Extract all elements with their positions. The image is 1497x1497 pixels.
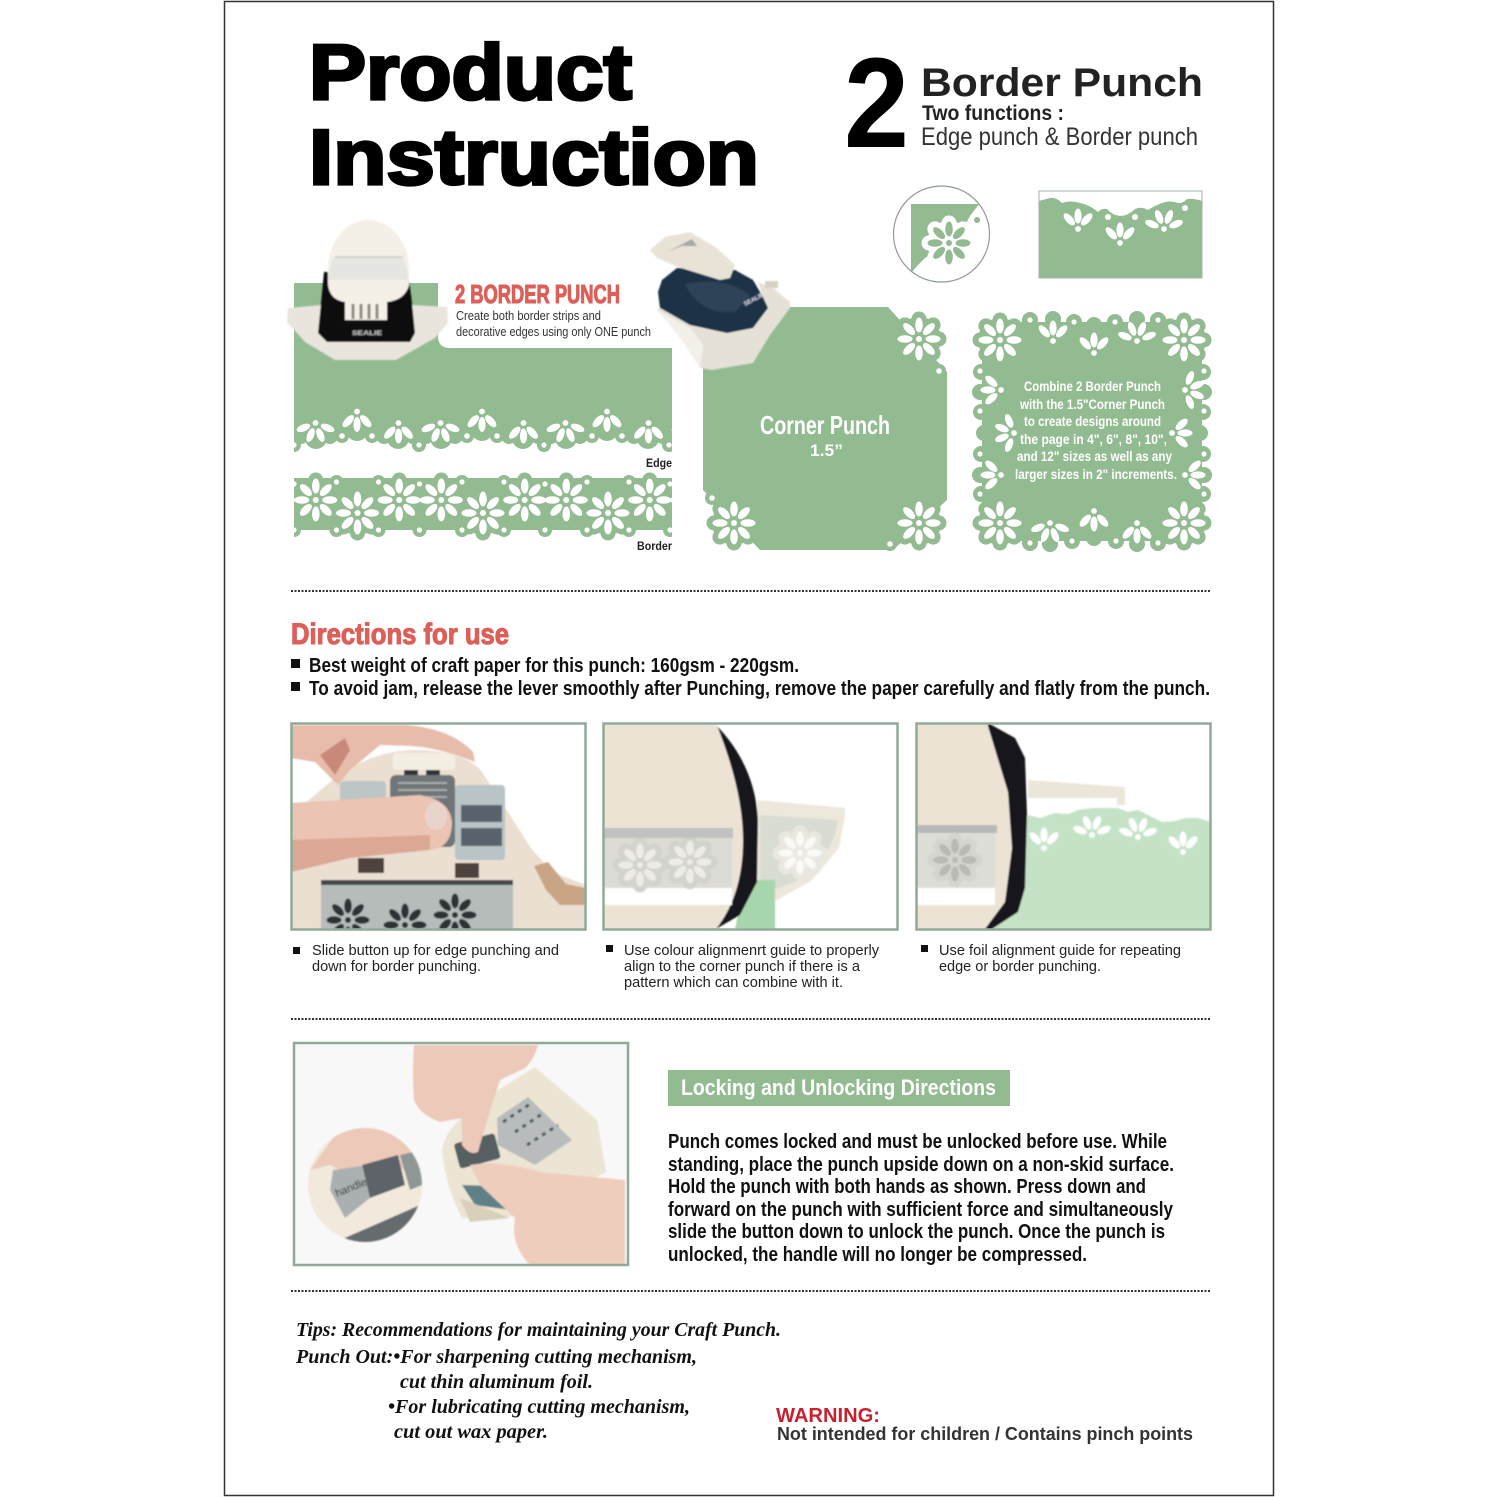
locking directions paragraph: forward on the punch with sufficient force and simultaneously — [668, 1199, 1174, 1221]
icon: navy punch: SEALIE — [743, 292, 765, 308]
locking directions paragraph — [668, 1131, 1174, 1266]
photo: alignment guide — [603, 723, 898, 930]
icon: corner punch sample in circle — [894, 186, 990, 282]
combine text: Combine 2 Border Punch — [1024, 378, 1161, 394]
photo: unlocking with both hands: handle — [334, 1176, 369, 1200]
title: Instruction — [309, 113, 759, 201]
combine text: to create designs around — [1024, 413, 1161, 429]
heading: 2 border punch: decorative edges using only ONE punch — [456, 324, 651, 339]
combine text: the page in 4", 6", 8", 10", — [1020, 431, 1167, 447]
title: Product — [309, 28, 632, 116]
heading: 2 border punch: Create both border strips and — [456, 308, 601, 323]
icon: cream and black punch — [287, 220, 448, 360]
tips text: Tips: Recommendations for maintaining your Craft Punch. — [296, 1319, 781, 1341]
label: border: Border — [637, 541, 672, 553]
caption 2 — [606, 943, 880, 991]
divider — [291, 1018, 1210, 1020]
icon: cream and black punch: SEALIE — [352, 331, 382, 337]
locking directions paragraph: unlocked, the handle will no longer be compressed. — [668, 1244, 1087, 1266]
heading: directions for use: Directions for use — [291, 618, 509, 651]
product name heading — [844, 32, 1203, 175]
warning — [776, 1405, 1193, 1444]
icon: edge punch sample — [1039, 191, 1202, 278]
panel: edge and border strips — [294, 283, 672, 550]
heading: 2 border punch: 2 BORDER PUNCH — [455, 279, 620, 309]
panel: corner punch sample — [703, 307, 947, 551]
caption 2: align to the corner punch if there is a — [624, 959, 861, 975]
caption 1 — [293, 943, 559, 975]
combine text: and 12" sizes as well as any — [1017, 448, 1172, 464]
product name heading: Two functions : — [922, 102, 1064, 125]
caption 3: edge or border punching. — [939, 959, 1101, 975]
tips text: cut out wax paper. — [394, 1421, 548, 1443]
locking directions paragraph: Hold the punch with both hands as shown. Press down and — [668, 1176, 1146, 1198]
title — [309, 28, 759, 201]
caption 3: Use foil alignment guide for repeating — [939, 943, 1181, 959]
heading: locking and unlocking: Locking and Unlocking Directions — [681, 1075, 996, 1100]
directions bullet list: Best weight of craft paper for this punch: 160gsm - 220gsm. — [309, 655, 799, 677]
heading: 2 border punch — [455, 279, 651, 339]
directions bullet list: To avoid jam, release the lever smoothly after Punching, remove the paper carefully and flatly from the punch. — [309, 678, 1210, 700]
combine text — [1015, 378, 1177, 482]
caption 1: down for border punching. — [312, 959, 481, 975]
panel: corner punch sample: 1.5” — [810, 441, 843, 460]
caption 3 — [921, 943, 1181, 975]
locking directions paragraph: slide the button down to unlock the punch. Once the punch is — [668, 1221, 1165, 1243]
caption 2: pattern which can combine with it. — [624, 975, 843, 991]
panel: corner punch sample: Corner Punch — [760, 410, 890, 440]
tips text — [295, 1319, 781, 1443]
page frame — [224, 2, 1274, 1496]
photo: foil alignment — [916, 723, 1211, 930]
panel: combined corner and border sample — [972, 311, 1212, 552]
combine text: with the 1.5"Corner Punch — [1019, 396, 1165, 412]
photo: sliding the button — [291, 723, 586, 946]
divider — [291, 1290, 1210, 1292]
tips text: •For lubricating cutting mechanism, — [388, 1396, 690, 1418]
product name heading: 2 — [844, 32, 909, 175]
photo: unlocking with both hands — [294, 1043, 628, 1265]
divider — [291, 590, 1210, 592]
combine text: larger sizes in 2" increments. — [1015, 466, 1177, 482]
product name heading: Border Punch — [921, 61, 1203, 105]
tips text: cut thin aluminum foil. — [400, 1371, 593, 1393]
warning: Not intended for children / Contains pinch points — [777, 1424, 1193, 1444]
locking directions paragraph: Punch comes locked and must be unlocked before use. While — [668, 1131, 1167, 1153]
locking directions paragraph: standing, place the punch upside down on a non-skid surface. — [668, 1154, 1174, 1176]
warning: WARNING: — [776, 1405, 880, 1427]
product name heading: Edge punch & Border punch — [921, 123, 1198, 151]
label: edge: Edge — [646, 458, 672, 470]
caption 2: Use colour alignmenrt guide to properly — [624, 943, 880, 959]
icon: navy punch — [650, 232, 790, 370]
caption 1: Slide button up for edge punching and — [312, 943, 559, 959]
heading: locking and unlocking — [668, 1070, 1010, 1106]
directions bullet list — [291, 655, 1210, 700]
tips text: Punch Out:•For sharpening cutting mechanism, — [295, 1346, 697, 1368]
